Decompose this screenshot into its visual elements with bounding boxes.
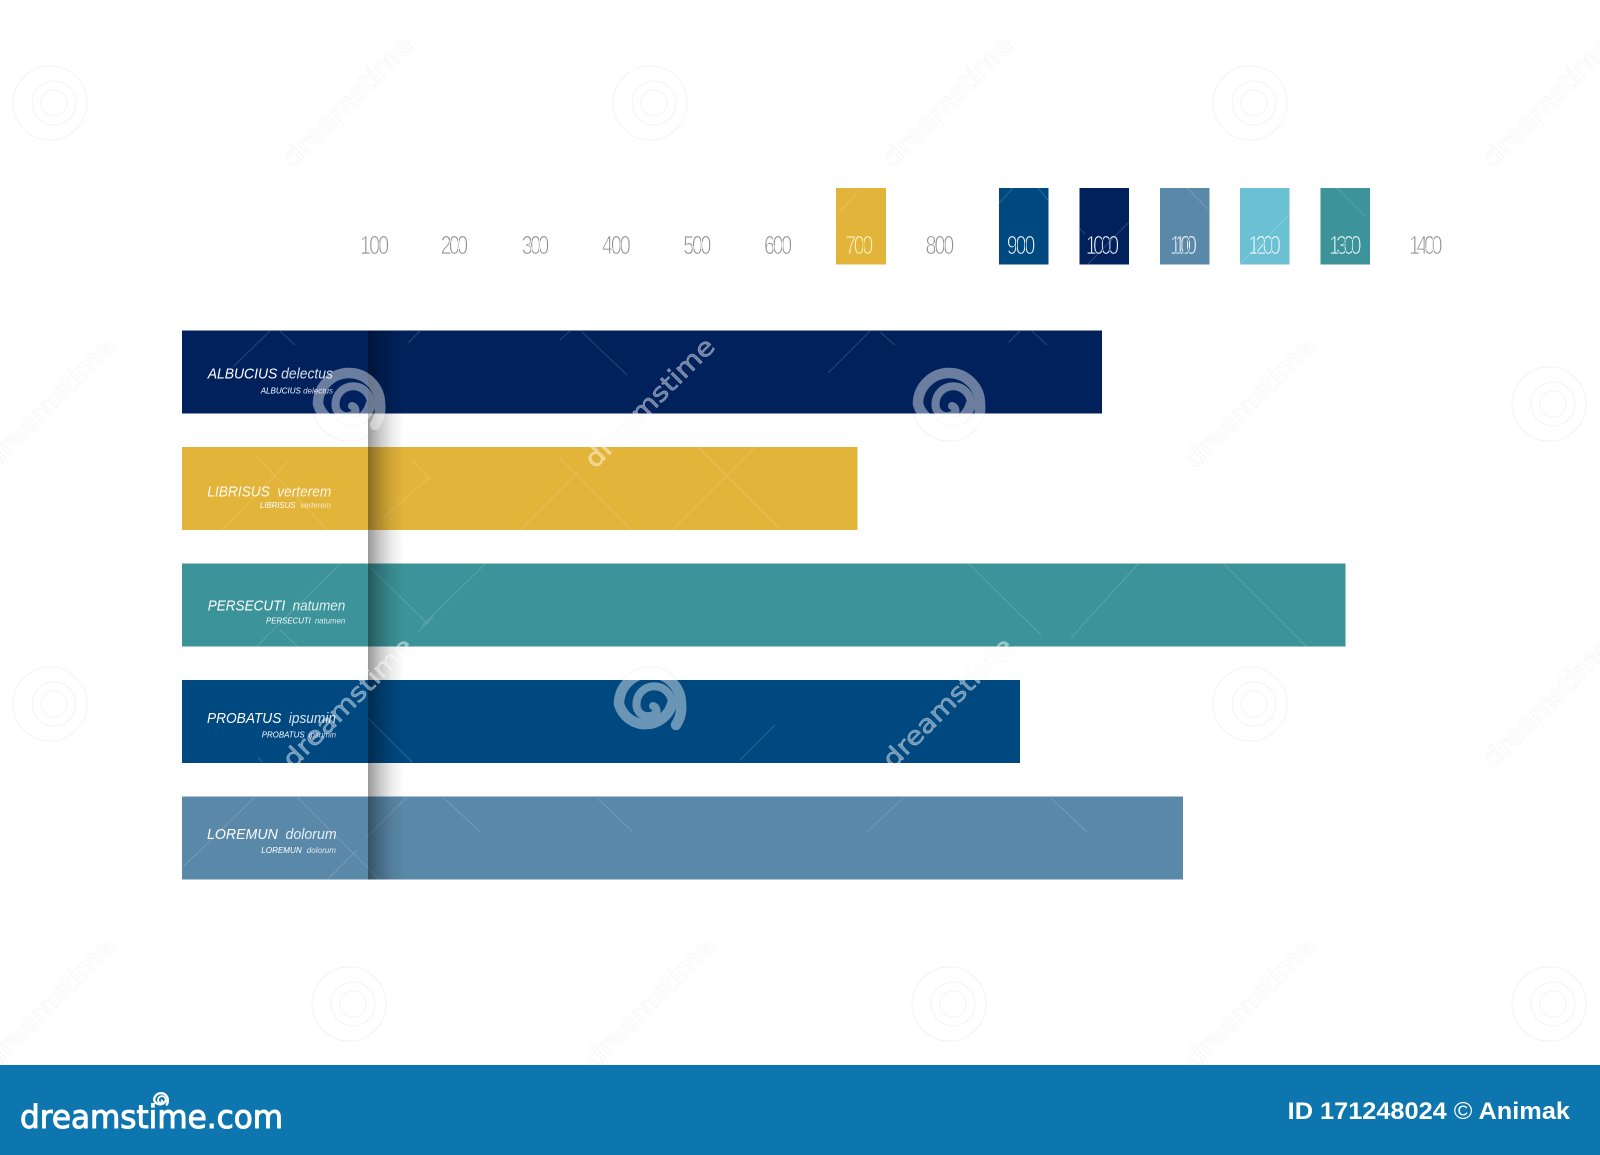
label: LOREMUN dolorum: LOREMUN dolorum (207, 826, 337, 843)
watermark: translucent marks visible over bars: dreamstime (277, 632, 419, 774)
label: LOREMUN dolorum (207, 826, 337, 855)
watermark: translucent marks visible over bars: dreamstime (877, 632, 1019, 774)
scale numbers 100 to 1400: 1000 (1086, 230, 1118, 260)
watermark: faint spirals and wordmarks on white: dreamstime (877, 632, 1019, 774)
watermark: faint spirals and wordmarks on white: dreamstime (1179, 332, 1321, 474)
scale numbers 100 to 1400: 700 (845, 230, 873, 260)
label: PERSECUTI natumen: PERSECUTI natumen (208, 598, 345, 614)
label: LIBRISUS verterem: LIBRISUS verterem (207, 484, 331, 500)
bar: PROBATUS ipsumin (182, 680, 1020, 763)
label: PERSECUTI natumen: PERSECUTI natumen (266, 616, 346, 626)
fold shadow across all bars (368, 330, 404, 880)
label: LOREMUN dolorum: LOREMUN dolorum (261, 845, 336, 855)
label: PROBATUS ipsumin: PROBATUS ipsumin (262, 730, 336, 740)
watermark: faint spirals and wordmarks on white: dreamstime (1477, 31, 1600, 173)
scale numbers 100 to 1400: 500 (683, 230, 711, 260)
label: PROBATUS ipsumin: PROBATUS ipsumin (207, 710, 336, 727)
footer logo: dreamstime.com: dreamstime.com (20, 1098, 283, 1136)
scale numbers 100 to 1400 (360, 230, 1442, 260)
bar: ALBUCIUS delectus (182, 330, 1102, 414)
icon: spiral (154, 1093, 168, 1105)
watermark: faint spirals and wordmarks on white: dreamstime (1179, 932, 1321, 1074)
label: ALBUCIUS delectus: ALBUCIUS delectus (207, 366, 333, 382)
footer credit: ID 171248024 © Animak (1288, 1098, 1571, 1125)
bar labels (207, 366, 346, 855)
bar: LOREMUN dolorum (182, 796, 1183, 880)
watermark: faint spirals and wordmarks on white: dreamstime (579, 932, 721, 1074)
scale numbers 100 to 1400: 600 (764, 230, 791, 260)
scale numbers 100 to 1400: 200 (441, 230, 467, 260)
label: PROBATUS ipsumin (207, 710, 336, 740)
bar: LIBRISUS verterem (182, 447, 858, 530)
label: ALBUCIUS delectus: ALBUCIUS delectus (260, 386, 334, 396)
watermark: faint spirals and wordmarks on white: dreamstime (877, 31, 1019, 173)
scale numbers 100 to 1400: 400 (602, 230, 630, 260)
scale numbers 100 to 1400: 1200 (1248, 230, 1280, 260)
label: LIBRISUS verterem (207, 484, 331, 510)
watermark: translucent marks visible over bars: dreamstime (579, 332, 721, 474)
bar: PERSECUTI natumen (182, 564, 1346, 646)
watermark: thin diagonal lines over bars and swatches (183, 188, 1365, 879)
footer band (0, 1065, 1600, 1155)
label: PERSECUTI natumen (208, 598, 346, 626)
watermark: translucent marks visible over bars (277, 332, 1019, 774)
watermark: faint spirals and wordmarks on white: dreamstime (277, 632, 419, 774)
label: ALBUCIUS delectus (207, 366, 334, 396)
scale numbers 100 to 1400: 800 (926, 230, 953, 260)
legend: colour swatches (836, 188, 1370, 264)
watermark: faint spirals and wordmarks on white: dreamstime (1477, 632, 1600, 774)
label: LIBRISUS verterem: LIBRISUS verterem (260, 500, 331, 510)
scale numbers 100 to 1400: 100 (360, 230, 388, 260)
watermark: faint spirals and wordmarks on white: dreamstime (277, 31, 419, 173)
watermark: faint spirals and wordmarks on white: dreamstime (579, 332, 721, 474)
scale numbers 100 to 1400: 1100 (1170, 230, 1196, 260)
scale numbers 100 to 1400: 1400 (1409, 230, 1442, 260)
scale numbers 100 to 1400: 300 (522, 230, 549, 260)
scale numbers 100 to 1400: 900 (1007, 230, 1035, 260)
scale numbers 100 to 1400: 1300 (1329, 230, 1361, 260)
